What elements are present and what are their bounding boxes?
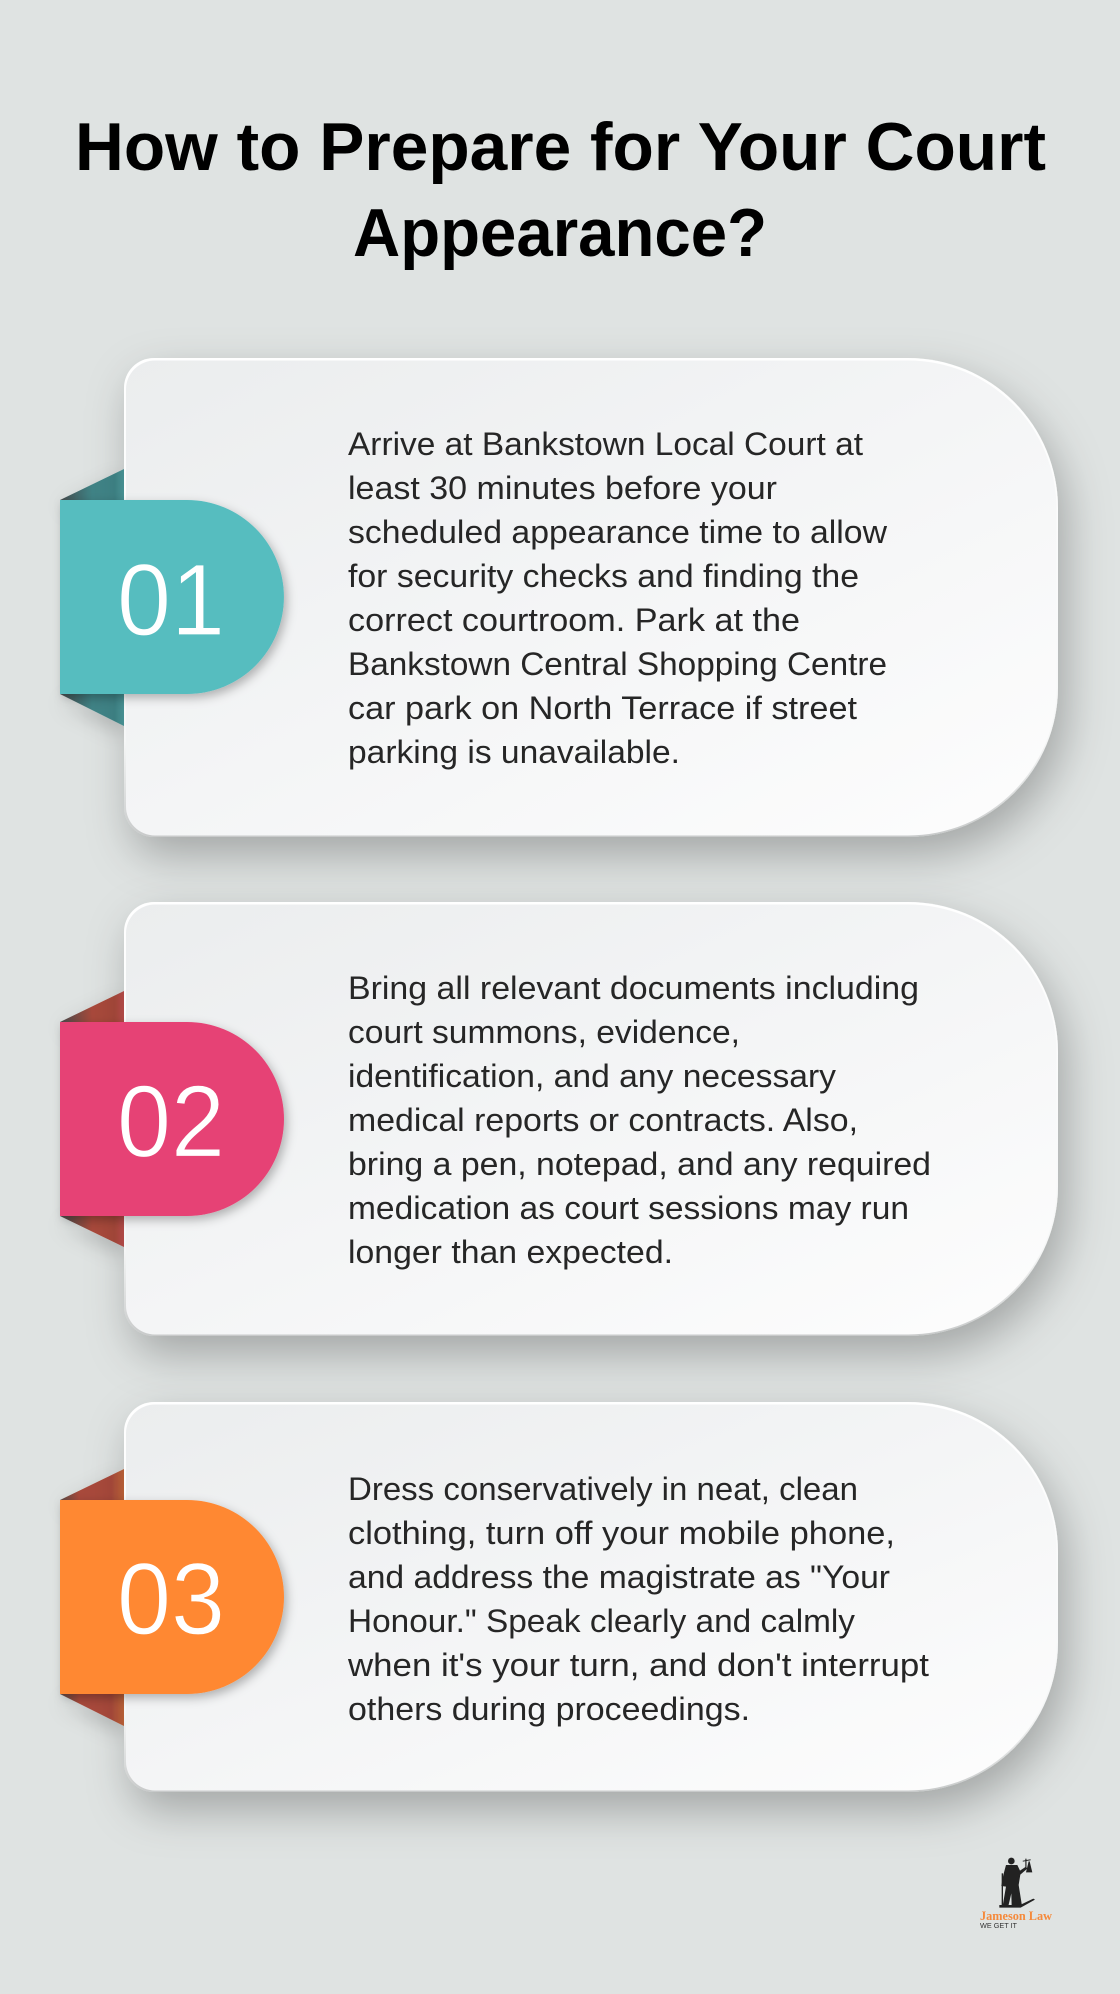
text: step 1 [348,426,888,770]
text: step 1: scheduled appearance time to allow [348,514,888,550]
text: step 2: longer than expected. [348,1234,673,1270]
logo: Jameson Law [980,1858,1052,1930]
text: step 2 [348,970,931,1270]
number tab: 03: 03 [117,1542,225,1656]
card: step 2 [124,902,1058,1336]
text: step 3 [347,1471,929,1727]
card: step 3 [124,1402,1058,1792]
icon: lady justice [999,1858,1035,1908]
panel: step 2 [60,902,1058,1336]
text: step 1: for security checks and finding the [348,558,859,594]
title [75,109,1046,271]
text: step 2: medical reports or contracts. Also, [348,1102,858,1138]
text: step 2: medication as court sessions may run [348,1190,909,1226]
text: step 1: correct courtroom. Park at the [348,602,800,638]
text: step 3: others during proceedings. [348,1691,750,1727]
text: step 2: Bring all relevant documents including [348,970,919,1006]
text: step 3: when it's your turn, and don't interrupt [347,1647,929,1683]
ribbon folds: step 3 [60,1469,124,1726]
logo name: Jameson Law [980,1909,1052,1923]
text: step 1: Arrive at Bankstown Local Court at [348,426,863,462]
text: step 3: and address the magistrate as "Your [348,1559,890,1595]
title: How to Prepare for Your Court [75,109,1046,185]
panel: step 1 [60,358,1058,837]
ribbon folds: step 2 [60,991,124,1247]
ribbon folds: step 1 [60,469,124,726]
card: step 1 [124,358,1058,837]
text: step 1: Bankstown Central Shopping Centre [348,646,887,682]
text: step 3: clothing, turn off your mobile phone, [348,1515,895,1551]
text: step 1: car park on North Terrace if street [348,690,857,726]
title: Appearance? [353,195,767,271]
number tab: 01 [60,500,284,694]
text: step 2: court summons, evidence, [348,1014,740,1050]
text: step 2: bring a pen, notepad, and any required [348,1146,931,1182]
number tab: 02: 02 [117,1064,225,1178]
text: step 3: Honour." Speak clearly and calmly [348,1603,856,1639]
logo tagline: WE GET IT [980,1923,1018,1930]
text: step 1: least 30 minutes before your [348,470,777,506]
text: step 2: identification, and any necessary [348,1058,837,1094]
number tab: 02 [60,1022,284,1216]
number tab: 01: 01 [117,543,225,657]
number tab: 03 [60,1500,284,1694]
text: step 3: Dress conservatively in neat, clean [348,1471,858,1507]
panel: step 3 [60,1402,1058,1792]
text: step 1: parking is unavailable. [348,734,680,770]
